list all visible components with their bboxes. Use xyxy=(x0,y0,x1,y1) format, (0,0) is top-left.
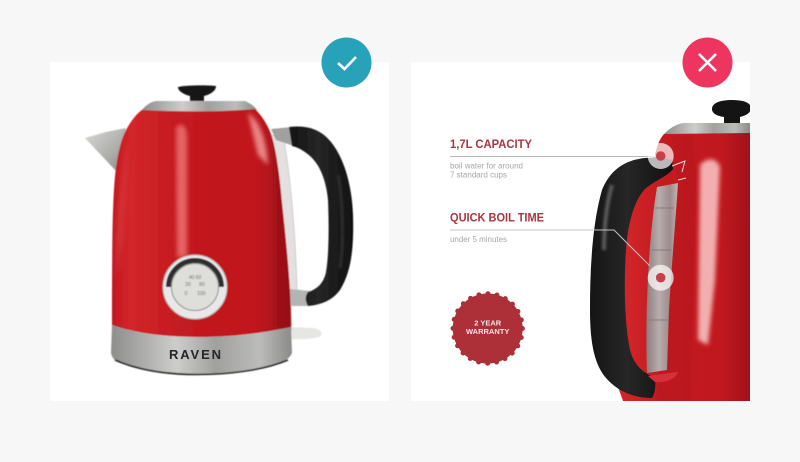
icon: kettle xyxy=(85,85,353,375)
callout: capacity xyxy=(450,137,674,180)
close-up chrome details xyxy=(672,161,686,180)
kettle steel base xyxy=(111,325,292,375)
callout: capacity: boil water for around xyxy=(450,162,523,170)
panel: incorrect detail image xyxy=(450,100,750,401)
kettle thermometer gauge xyxy=(163,255,227,319)
icon: kettle close-up xyxy=(590,100,751,401)
kettle water window xyxy=(270,134,297,292)
kettle knob xyxy=(178,85,216,101)
kettle handle brackets xyxy=(271,127,294,146)
warranty badge: WARRANTY xyxy=(466,327,509,336)
kettle thermometer gauge: 0 100 xyxy=(185,291,206,297)
infographic canvas xyxy=(86,38,750,401)
callout: boil time xyxy=(450,210,674,291)
icon: cross badge xyxy=(682,38,732,88)
close-up handle xyxy=(590,158,673,398)
close-up body xyxy=(608,133,750,401)
kettle base plate xyxy=(288,327,322,339)
icon: check badge xyxy=(322,38,372,88)
callout: capacity: 7 standard cups xyxy=(450,170,507,180)
kettle handle xyxy=(289,126,353,306)
kettle thermometer gauge: 40 60 xyxy=(189,275,201,281)
close-up knob xyxy=(712,100,751,123)
close-up water window xyxy=(646,183,678,373)
kettle body xyxy=(112,109,291,337)
kettle lid xyxy=(141,101,257,112)
callout: capacity: 1,7L CAPACITY xyxy=(450,137,532,151)
close-up lid xyxy=(664,123,750,135)
brand label: RAVEN xyxy=(169,347,221,362)
kettle thermometer gauge: 20 80 xyxy=(185,282,205,288)
panel: correct product image xyxy=(86,84,354,376)
callout: boil time: under 5 minutes xyxy=(450,235,507,244)
callout: boil time: QUICK BOIL TIME xyxy=(450,210,544,224)
warranty badge xyxy=(453,294,523,364)
kettle spout xyxy=(85,128,126,172)
warranty badge: 2 YEAR xyxy=(474,318,502,328)
